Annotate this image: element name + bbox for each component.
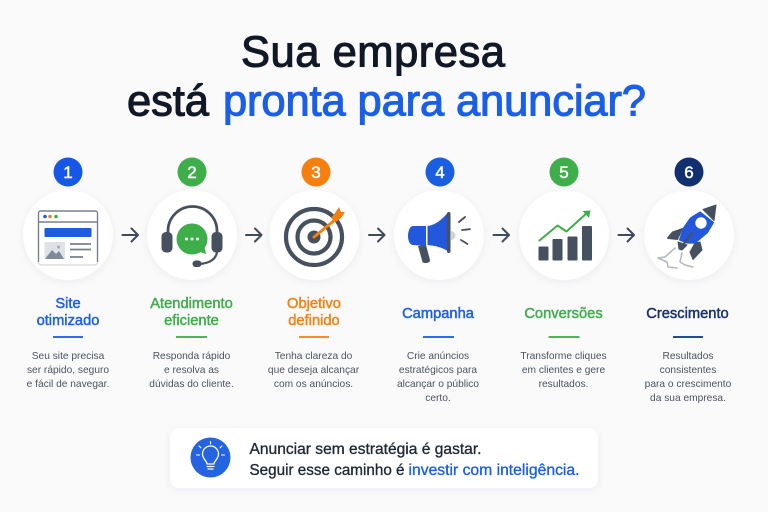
callout (170, 428, 598, 488)
description: Responda rápido (153, 351, 231, 362)
icon: browser window (23, 190, 113, 280)
arrow 2 (246, 228, 262, 242)
underline (673, 336, 703, 338)
title: pronta para anunciar? (223, 78, 646, 126)
underline (53, 336, 83, 338)
callout text: investir com inteligência. (408, 462, 580, 479)
step 3: objetivo definido (268, 158, 360, 390)
description: Tenha clareza do (275, 351, 353, 362)
number badge 4 (426, 158, 454, 186)
label: atendimento eficiente: Atendimento (150, 296, 233, 312)
number badge 6: 6 (684, 163, 694, 182)
icon: target with arrow (270, 190, 360, 280)
underline (176, 336, 207, 338)
description: dúvidas do cliente. (149, 379, 234, 390)
step 6: crescimento (644, 158, 734, 404)
label: site otimizado: Site (55, 296, 81, 312)
title: Sua empresa (241, 28, 506, 76)
step 5: conversões (519, 158, 609, 390)
icon: light bulb (190, 438, 230, 478)
description: Resultados (663, 351, 713, 362)
number badge 1: 1 (63, 163, 73, 182)
description: Seu site precisa (32, 351, 105, 362)
description: Transforme cliques (520, 351, 607, 362)
underline (548, 336, 580, 338)
description (645, 351, 732, 404)
callout text (250, 441, 580, 479)
description: Crie anúncios (407, 351, 469, 362)
label: atendimento eficiente (150, 296, 233, 329)
description (268, 351, 360, 390)
number badge 3: 3 (311, 163, 321, 182)
label: site otimizado (37, 296, 99, 329)
step 4: campanha (394, 158, 484, 404)
label: site otimizado: otimizado (37, 313, 99, 329)
arrow 1 (122, 228, 138, 242)
number badge 6 (674, 158, 704, 186)
description: que deseja alcançar (268, 365, 360, 376)
description (397, 351, 479, 404)
underline (299, 336, 329, 338)
icon: rocket (644, 190, 734, 280)
description: alcançar o público (397, 379, 479, 390)
arrow 3 (369, 228, 384, 242)
label: atendimento eficiente: eficiente (164, 313, 219, 329)
underline (423, 336, 454, 338)
description: da sua empresa. (650, 393, 726, 404)
label: crescimento: Crescimento (646, 306, 729, 322)
label: conversões: Conversões (524, 306, 603, 322)
number badge 1 (54, 158, 82, 186)
description: e fácil de navegar. (27, 379, 109, 390)
step 1: site otimizado (23, 158, 113, 390)
description: estratégicos para (399, 365, 477, 376)
description: com os anúncios. (274, 379, 353, 390)
number badge 5 (550, 158, 578, 186)
icon: headset with chat bubble (147, 190, 237, 280)
number badge 4: 4 (435, 163, 445, 182)
label: objetivo definido (287, 296, 341, 329)
label: objetivo definido: Objetivo (287, 296, 341, 312)
label: objetivo definido: definido (288, 313, 340, 329)
description: certo. (425, 393, 451, 404)
label: campanha: Campanha (402, 306, 475, 322)
number badge 5: 5 (559, 163, 569, 182)
description: ser rápido, seguro (27, 365, 109, 376)
step 2: atendimento eficiente (147, 158, 237, 390)
description: em clientes e gere (522, 365, 605, 376)
description: consistentes (660, 365, 716, 376)
arrow 5 (618, 228, 634, 242)
description: para o crescimento (645, 379, 732, 390)
description (27, 351, 109, 390)
description: resultados. (539, 379, 588, 390)
icon: megaphone (394, 190, 484, 280)
title (127, 28, 646, 126)
description: e resolva as (164, 365, 219, 376)
description (520, 351, 607, 390)
number badge 2: 2 (187, 163, 197, 182)
description (149, 351, 234, 390)
arrow 4 (494, 228, 509, 242)
icon: growth chart (519, 190, 609, 280)
title: está (127, 78, 210, 126)
callout text: Anunciar sem estratégia é gastar. (250, 441, 482, 458)
callout text: Seguir esse caminho é (250, 462, 404, 479)
number badge 2 (178, 158, 206, 186)
number badge 3 (302, 158, 330, 186)
